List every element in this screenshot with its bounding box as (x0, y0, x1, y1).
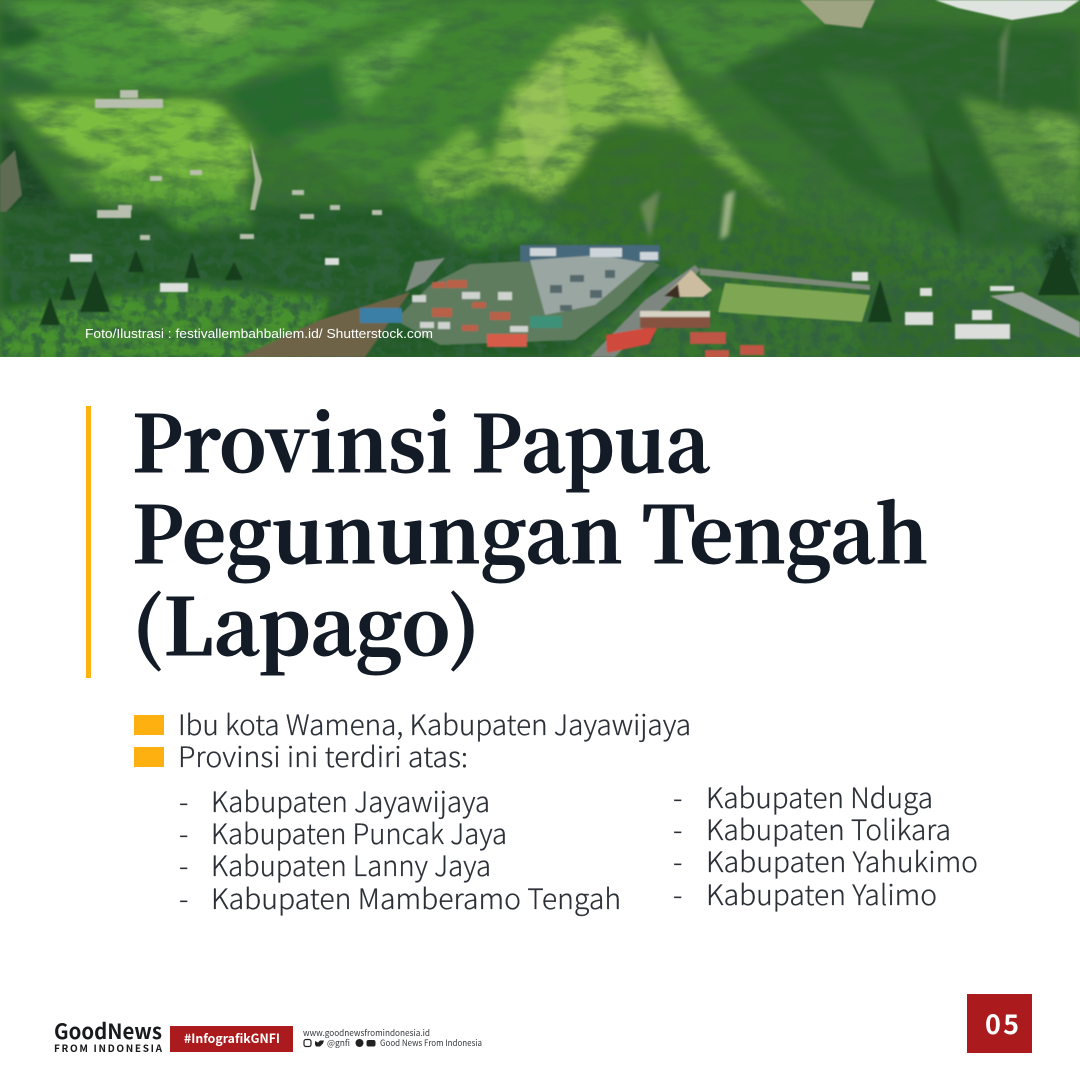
town block (395, 255, 660, 345)
coloured roofs (606, 326, 658, 353)
houses (95, 90, 382, 240)
bullet: composition: Provinsi ini terdiri atas: (178, 736, 468, 776)
list column right (673, 777, 978, 914)
list column right: Kabupaten Yalimo (706, 874, 937, 914)
left mountain flank (281, 0, 629, 202)
upper left hills (0, 0, 420, 90)
list column right: - (673, 841, 682, 881)
page number badge (967, 994, 1032, 1053)
large buildings (640, 316, 711, 329)
hashtag badge: #InfografikGNFI (184, 1028, 280, 1047)
list column left (179, 781, 621, 918)
title: Pegunungan Tengah (132, 474, 928, 586)
hillside texture (0, 0, 1080, 357)
list column right: - (673, 874, 682, 914)
valley floor (10, 100, 255, 190)
title accent bar (86, 406, 91, 678)
main peak (490, 15, 700, 200)
hashtag badge (170, 1026, 293, 1052)
website and social links (303, 1027, 482, 1049)
list column left: - (179, 813, 188, 853)
list column left: - (179, 845, 188, 885)
road and field (718, 283, 870, 322)
background photo: green mountain valley with town (0, 0, 1080, 380)
right mountains (720, 20, 1080, 250)
title: (Lapago) (132, 566, 480, 678)
bullet: capital: Ibu kota Wamena, Kabupaten Jayawijaya (178, 704, 691, 744)
title: Provinsi Papua (132, 383, 710, 495)
icon: youtube (366, 1040, 376, 1046)
logo: GoodNews From Indonesia: FROM INDONESIA (54, 1040, 163, 1055)
list column left: Kabupaten Puncak Jaya (211, 813, 507, 853)
streaks on slopes (515, 60, 570, 180)
list column right: Kabupaten Tolikara (706, 809, 951, 849)
list column left: Kabupaten Lanny Jaya (211, 845, 491, 885)
list column right: - (673, 809, 682, 849)
icon: twitter (315, 1040, 324, 1046)
icon: facebook (356, 1039, 364, 1047)
website and social links: Good News From Indonesia (380, 1037, 482, 1049)
list column right: Kabupaten Yahukimo (706, 841, 978, 881)
title (132, 383, 928, 678)
page number badge: 05 (985, 1003, 1019, 1042)
list column right: Kabupaten Nduga (706, 777, 933, 817)
list column left: Kabupaten Jayawijaya (211, 781, 490, 821)
list column right: - (673, 777, 682, 817)
logo: GoodNews From Indonesia: GoodNews (54, 1016, 162, 1046)
list column left: - (179, 878, 188, 918)
list column left: - (179, 781, 188, 821)
website and social links: @gnfi (327, 1037, 350, 1049)
trees (40, 243, 1080, 325)
photo credit: Foto/Ilustrasi : festivallembahbaliem.id/ Shutterstock.com (85, 326, 433, 341)
icon: instagram (304, 1040, 311, 1046)
lower left wooded valley (0, 205, 680, 360)
sky and bare rock (935, 0, 1080, 20)
website and social links: www.goodnewsfromindonesia.id (303, 1027, 430, 1039)
list column left: Kabupaten Mamberamo Tengah (211, 878, 621, 918)
